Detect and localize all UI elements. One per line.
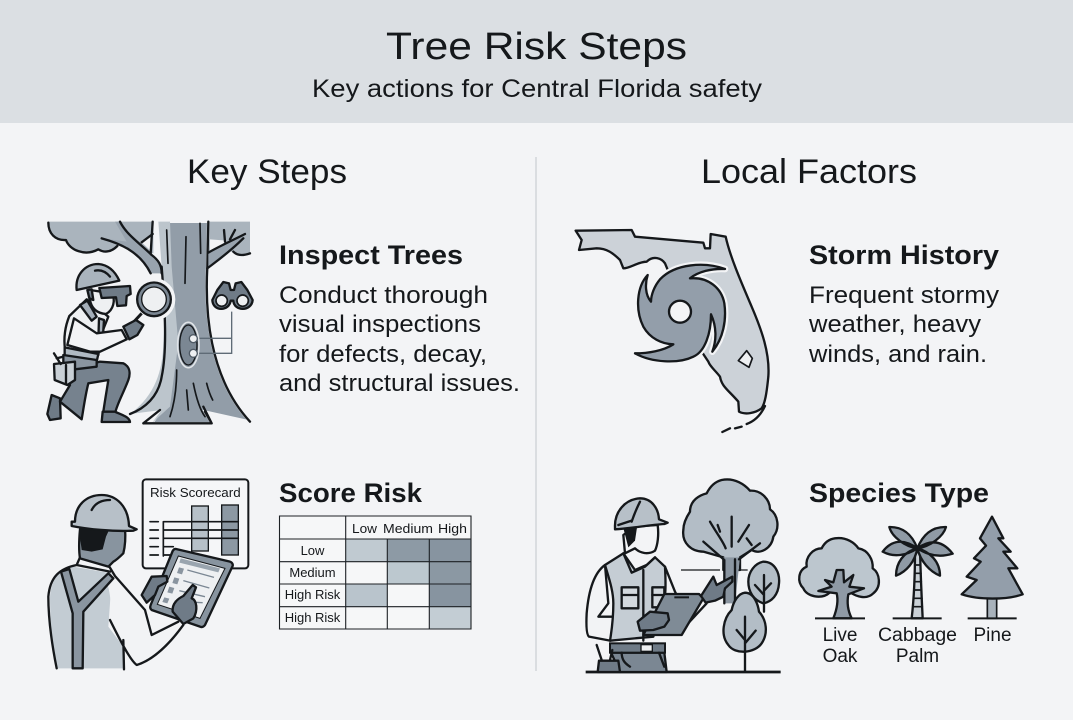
worker vest (605, 553, 665, 641)
risk matrix table: High (438, 521, 467, 536)
step heading: Inspect Trees (279, 240, 463, 270)
left branch (102, 222, 162, 273)
scorecard: Risk Scorecard (150, 485, 241, 500)
text block: inspect trees: visual inspections (279, 311, 481, 338)
risk matrix table: Low (352, 521, 378, 536)
text block: inspect trees: and structural issues. (279, 370, 520, 397)
risk matrix table: Medium (383, 521, 433, 536)
florida outline (576, 230, 769, 413)
panel: key steps (47, 153, 520, 669)
small tree (748, 562, 779, 612)
subtitle: Key actions for Central Florida safety (312, 75, 763, 103)
torso and arm (64, 299, 108, 355)
live oak (799, 538, 879, 618)
step heading: Score Risk (279, 478, 423, 508)
foreground tree (724, 593, 766, 671)
scorecard (143, 479, 248, 568)
icon: arborist with clipboard and trees (586, 479, 781, 672)
text block: storm history: weather, heavy (808, 311, 981, 338)
panel: local factors (576, 153, 1023, 672)
species labels: Palm (896, 646, 939, 667)
suspenders (61, 569, 113, 668)
risk matrix table: High Risk (285, 610, 341, 625)
head (623, 525, 658, 553)
worker pants (611, 653, 667, 672)
text block: score risk (279, 478, 471, 629)
head (90, 290, 114, 314)
text block: inspect trees (279, 240, 520, 397)
callout lines (197, 312, 232, 353)
large tree (681, 479, 777, 605)
species labels: Oak (823, 646, 858, 667)
worker body (48, 557, 183, 669)
text block: inspect trees: Conduct thorough (279, 282, 488, 309)
tree species row (799, 517, 1023, 618)
worker arms (586, 565, 638, 641)
text block: inspect trees: for defects, decay, (279, 341, 487, 368)
cabbage palm (883, 527, 953, 618)
glove (123, 320, 143, 339)
species labels: Live (823, 625, 857, 646)
decay cavity (178, 322, 199, 368)
clipboard (643, 594, 703, 635)
tool pouch (54, 362, 75, 385)
magnifying glass (133, 278, 175, 321)
tool pouch (598, 661, 620, 672)
text block: storm history: winds, and rain. (808, 341, 987, 368)
text block: storm history (808, 240, 999, 368)
species labels: Pine (973, 625, 1012, 646)
icon: arborist inspecting tree (47, 222, 253, 423)
binoculars icon (212, 282, 253, 309)
head (79, 528, 125, 567)
factor heading: Species Type (809, 478, 989, 508)
heading: local factors: Local Factors (701, 153, 917, 191)
florida keys (722, 406, 765, 432)
hands (142, 576, 167, 603)
hands (638, 612, 669, 631)
species labels (823, 625, 1012, 667)
hard hat (615, 498, 668, 529)
heading: key steps: Key Steps (187, 153, 347, 191)
pine (962, 517, 1023, 618)
factor heading: Storm History (809, 240, 999, 270)
binoculars held (99, 286, 131, 306)
legs and boots (47, 395, 61, 420)
icon: arborist with risk scorecard (48, 479, 248, 669)
canopy (48, 222, 153, 253)
trunk (130, 222, 250, 423)
lake okeechobee (738, 351, 752, 367)
ground line (586, 668, 781, 676)
text block: species type (799, 478, 1023, 667)
risk matrix table: High Risk (285, 587, 341, 602)
header band (0, 0, 1073, 123)
hurricane symbol (635, 265, 725, 361)
right branch (208, 235, 245, 268)
text block: storm history: Frequent stormy (809, 282, 999, 309)
icon: florida map with hurricane (576, 230, 769, 432)
tablet (150, 549, 233, 627)
risk matrix table (280, 516, 471, 629)
title: Tree Risk Steps (386, 26, 687, 68)
species labels: Cabbage (878, 625, 957, 646)
risk matrix table: Medium (289, 565, 336, 580)
hard hat (72, 495, 137, 531)
risk matrix table: Low (301, 543, 325, 558)
